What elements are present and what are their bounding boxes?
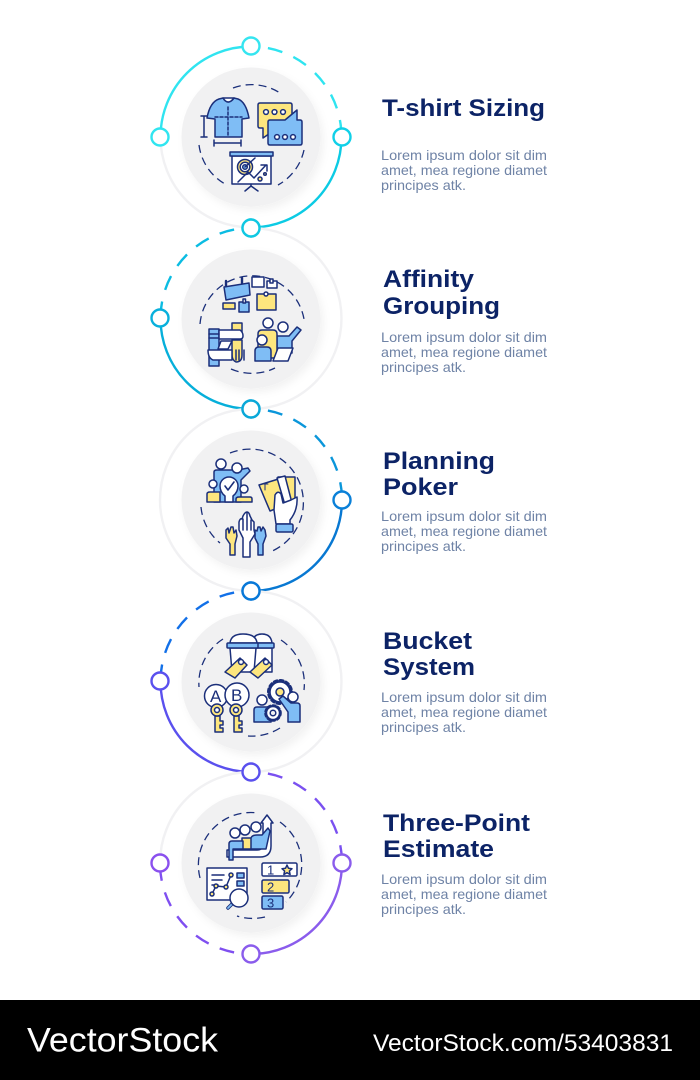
node: Planning Poker right — [334, 492, 350, 508]
heading: Bucket System — [383, 628, 475, 681]
text block: Three-Point Estimate: Lorem ipsum dolor sit dim — [381, 871, 547, 887]
nodes: Three-Point Estimate — [152, 764, 350, 962]
text block: Affinity Grouping — [381, 329, 547, 375]
heading: Three-Point Estimate — [383, 810, 530, 863]
heading: Planning Poker: Poker — [383, 474, 458, 501]
ring: Planning Poker — [160, 409, 342, 591]
heading: Planning Poker — [383, 448, 495, 501]
footer brand: VectorStock — [27, 1022, 219, 1060]
text block: Bucket System — [381, 689, 547, 735]
node: Bucket System left — [152, 672, 168, 690]
icon: team growth, chart and ranking: 3 — [267, 896, 274, 910]
text block: T-shirt Sizing: principes atk. — [381, 177, 466, 193]
text block: Bucket System: Lorem ipsum dolor sit dim — [381, 689, 547, 705]
node: Bucket System top — [242, 582, 260, 600]
text block: Bucket System: amet, mea regione diamet — [381, 704, 547, 720]
ring: Affinity Grouping — [160, 228, 342, 409]
heading: Affinity Grouping — [383, 266, 500, 320]
node: Affinity Grouping left — [152, 310, 168, 326]
icon: team idea, cards and raised hands — [201, 449, 303, 557]
panel: Planning Poker — [160, 400, 547, 591]
panel: Bucket System — [152, 582, 547, 772]
text block: Bucket System: principes atk. — [381, 719, 466, 735]
ring: Bucket System — [160, 591, 342, 772]
icon: team growth, chart and ranking: 1 — [267, 862, 274, 878]
heading: Planning Poker: Planning — [383, 448, 495, 475]
node: Affinity Grouping top — [242, 220, 260, 236]
icon: team growth, chart and ranking: 2 — [267, 880, 274, 894]
footer bar — [0, 1000, 700, 1080]
text block: Planning Poker: principes atk. — [381, 538, 466, 554]
heading: Three-Point Estimate: Estimate — [383, 836, 494, 863]
heading: Affinity Grouping: Affinity — [383, 266, 475, 293]
heading: Three-Point Estimate: Three-Point — [383, 810, 530, 837]
ring: Three-Point Estimate — [160, 772, 342, 954]
text block: Planning Poker — [381, 508, 547, 554]
icon: buckets, keys and gears: B — [231, 686, 242, 705]
node: Planning Poker top — [242, 400, 260, 418]
text block: T-shirt Sizing — [381, 147, 547, 193]
text block: Affinity Grouping: amet, mea regione diamet — [381, 344, 547, 360]
node: T-shirt Sizing bottom — [242, 220, 260, 236]
text block: Planning Poker: amet, mea regione diamet — [381, 523, 547, 539]
icon: team growth, chart and ranking — [198, 813, 302, 918]
text block: T-shirt Sizing: amet, mea regione diamet — [381, 162, 547, 178]
text block: T-shirt Sizing: Lorem ipsum dolor sit dim — [381, 147, 547, 163]
grey disc: Three-Point Estimate — [182, 794, 320, 932]
text block: Affinity Grouping: Lorem ipsum dolor sit dim — [381, 329, 547, 345]
text block: Three-Point Estimate: principes atk. — [381, 901, 466, 917]
text block: Affinity Grouping: principes atk. — [381, 359, 466, 375]
grey disc: Planning Poker — [182, 430, 320, 570]
panel: T-shirt Sizing — [152, 38, 547, 228]
heading: Bucket System: System — [383, 654, 475, 681]
grey disc: Bucket System — [182, 612, 320, 752]
text block: Three-Point Estimate: amet, mea regione diamet — [381, 886, 547, 902]
panel: Three-Point Estimate — [152, 764, 547, 962]
icon: buckets, keys and gears — [199, 634, 304, 736]
heading: Affinity Grouping: Grouping — [383, 293, 500, 320]
node: Affinity Grouping bottom — [242, 400, 260, 418]
footer url: VectorStock.com/53403831 — [373, 1030, 673, 1057]
icon: buckets, keys and gears: A — [210, 687, 222, 706]
node: Planning Poker bottom — [242, 582, 260, 600]
text block: Planning Poker: Lorem ipsum dolor sit dim — [381, 508, 547, 524]
icon: t-shirt, chat and target board — [199, 85, 304, 191]
heading: T-shirt Sizing: T-shirt Sizing — [382, 95, 545, 122]
icon: notes, joined hands and team — [200, 276, 304, 373]
ring: T-shirt Sizing — [160, 46, 342, 228]
panel: Affinity Grouping — [152, 220, 547, 409]
grey disc: T-shirt Sizing — [182, 68, 320, 206]
heading: Bucket System: Bucket — [383, 628, 472, 655]
text block: Three-Point Estimate — [381, 871, 547, 917]
grey disc: Affinity Grouping — [182, 250, 320, 388]
nodes: T-shirt Sizing — [152, 38, 350, 146]
